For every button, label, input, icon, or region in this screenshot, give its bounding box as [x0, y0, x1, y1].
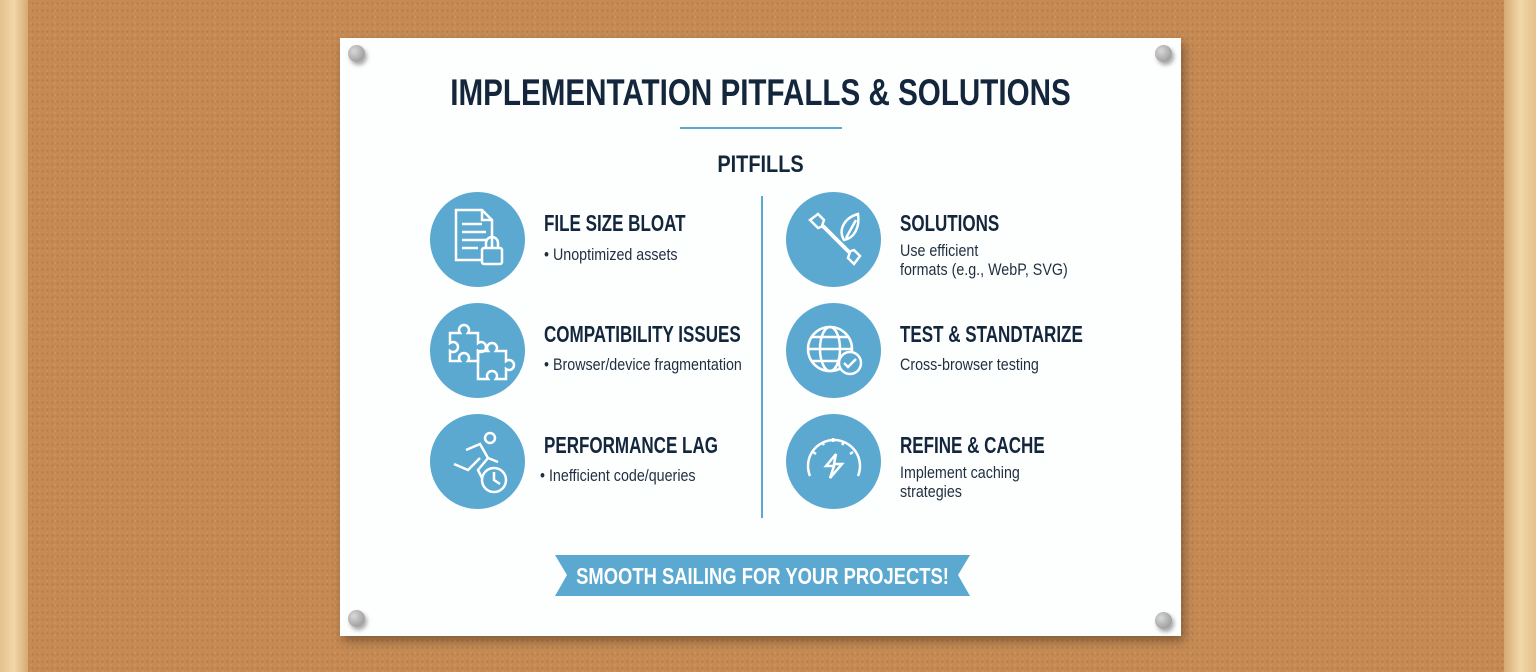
pins — [348, 45, 1176, 634]
poster — [340, 38, 1181, 636]
item: performance lag: PERFORMANCE LAG — [544, 432, 718, 458]
item: compatibility — [430, 303, 742, 398]
item: test — [786, 303, 1083, 398]
icon: globe check — [786, 303, 881, 398]
banner — [555, 555, 970, 596]
title: IMPLEMENTATION PITFALLS & SOLUTIONS — [450, 72, 1071, 113]
item: refine: REFINE & CACHE — [900, 432, 1045, 458]
item: solutions: SOLUTIONS — [900, 210, 999, 236]
icon: wrench leaf — [786, 192, 881, 287]
item: performance lag — [430, 414, 718, 509]
item: compatibility: • Browser/device fragmentation — [544, 355, 742, 374]
icon: puzzle — [430, 303, 525, 398]
item: test: TEST & STANDTARIZE — [900, 321, 1083, 347]
item: refine: Implement caching — [900, 463, 1020, 482]
banner: SMOOTH SAILING FOR YOUR PROJECTS! — [576, 563, 949, 589]
item: file size bloat: FILE SIZE BLOAT — [544, 210, 686, 236]
icon: document lock — [430, 192, 525, 287]
item: performance lag: • Inefficient code/queries — [540, 466, 696, 485]
item: solutions: formats (e.g., WebP, SVG) — [900, 260, 1068, 279]
item: solutions: Use efficient — [900, 241, 978, 260]
item: solutions — [786, 192, 1068, 287]
subheading: PITFILLS — [717, 151, 804, 178]
item: file size bloat — [430, 192, 686, 287]
item: refine: strategies — [900, 482, 962, 501]
icon: gauge bolt — [786, 414, 881, 509]
item: file size bloat: • Unoptimized assets — [544, 245, 678, 264]
item: compatibility: COMPATIBILITY ISSUES — [544, 321, 741, 347]
item: refine — [786, 414, 1045, 509]
item: test: Cross-browser testing — [900, 355, 1039, 374]
icon: runner clock — [430, 414, 525, 509]
